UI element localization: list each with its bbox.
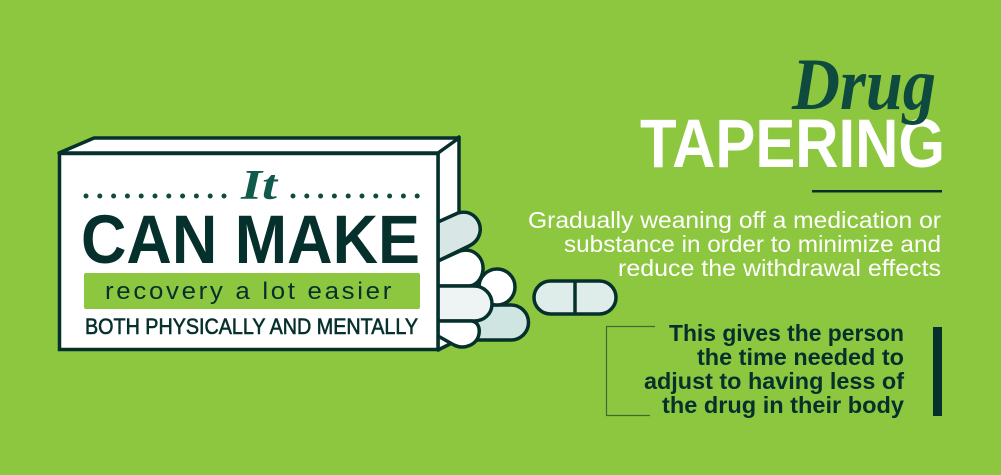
callout text: the drug in their body <box>662 392 904 418</box>
box top flap <box>59 138 459 153</box>
box side panel <box>438 137 459 240</box>
dotted rule right <box>290 194 420 198</box>
finger four <box>438 321 479 347</box>
definition text: reduce the withdrawal effects <box>618 255 941 281</box>
title script word: Drug <box>791 44 936 126</box>
finger three <box>438 286 492 321</box>
title <box>640 44 945 182</box>
callout bar <box>933 327 942 416</box>
finger two <box>438 250 483 286</box>
definition text <box>528 207 941 281</box>
box footer text: BOTH PHYSICALLY AND MENTALLY <box>85 314 418 339</box>
icon: capsule pill <box>534 281 616 314</box>
finger one <box>438 212 480 261</box>
box script word: It <box>240 163 279 209</box>
callout text: This gives the person <box>669 320 904 346</box>
callout text <box>644 320 904 418</box>
back finger: lower <box>470 305 528 340</box>
bracket <box>606 326 655 416</box>
banner text: recovery a lot easier <box>105 278 394 305</box>
callout text: adjust to having less of <box>644 368 904 394</box>
box front panel <box>60 154 438 350</box>
icon: hand holding pill box <box>438 137 528 350</box>
definition text: substance in order to minimize and <box>564 231 941 257</box>
box headline: CAN MAKE <box>81 201 420 278</box>
pill box <box>59 138 459 350</box>
definition text: Gradually weaning off a medication or <box>528 207 941 233</box>
callout text: the time needed to <box>697 344 904 370</box>
title underline <box>812 190 942 192</box>
back finger: upper <box>479 269 515 305</box>
box bottom corner <box>438 332 452 350</box>
title main word: TAPERING <box>640 105 945 182</box>
green banner <box>84 273 420 309</box>
dotted rule left <box>84 194 226 198</box>
